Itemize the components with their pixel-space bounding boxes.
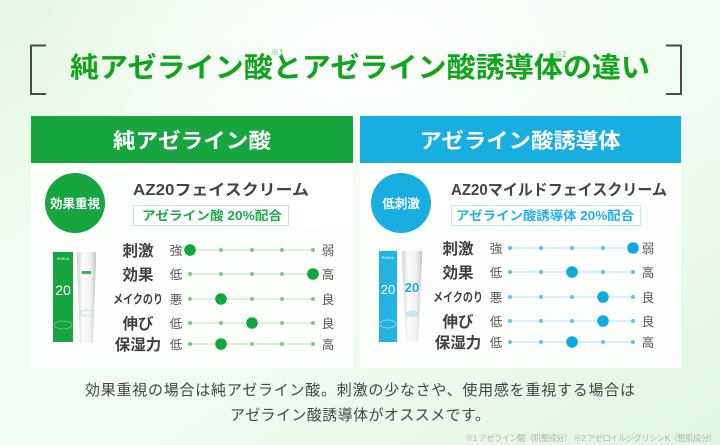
panel body (31, 163, 353, 368)
row: makeup adhesion: 悪 (170, 293, 182, 307)
panel: azelaic acid derivative (360, 116, 681, 368)
row: irritation (122, 242, 334, 260)
panel header (31, 116, 353, 163)
row: effect: 効果 (442, 264, 474, 282)
ingredient tag: アゼライン酸 20%配合 (142, 208, 283, 223)
panel body (360, 163, 681, 368)
badge: low irritation (371, 173, 431, 233)
row: moisturizing: 低 (490, 336, 503, 350)
row: effect (122, 266, 334, 284)
row: irritation: 刺激 (122, 242, 154, 260)
row: effect: 高 (322, 267, 334, 282)
icon: product box and tube: 20 (55, 282, 71, 298)
row: moisturizing (435, 334, 654, 352)
row: moisturizing: 保湿力 (115, 336, 161, 354)
icon: product box and tube: RAHUA (57, 257, 70, 261)
right bracket (666, 46, 681, 94)
icon: product box and tube (53, 252, 96, 343)
icon: product box and tube (379, 251, 422, 342)
row: makeup adhesion: メイクのり (433, 290, 483, 304)
row: irritation: 弱 (642, 242, 654, 256)
ingredient tag: アゼライン酸誘導体 20%配合 (456, 208, 635, 223)
row: irritation: 弱 (322, 244, 334, 258)
product name: AZ20フェイスクリーム (133, 181, 309, 199)
badge: low irritation: 低刺激 (382, 196, 420, 211)
footnote mark 2: ※2 (554, 50, 567, 59)
row: spreadability: 良 (642, 314, 655, 329)
row: effect (442, 264, 654, 282)
row: irritation: 強 (490, 242, 503, 256)
row: moisturizing: 保湿力 (435, 334, 481, 352)
row: effect: 低 (170, 268, 183, 282)
ingredient tag (134, 206, 288, 226)
icon: product box and tube: RAHUA (382, 256, 395, 260)
summary text (85, 382, 635, 424)
footnote mark 1: ※1 (271, 48, 284, 57)
panel header (360, 116, 681, 163)
row: makeup adhesion: 良 (642, 290, 655, 305)
panel heading: 純アゼライン酸 (113, 129, 271, 153)
row: spreadability: 良 (322, 316, 335, 331)
icon: product box and tube: 20 (405, 280, 419, 295)
panel heading: アゼライン酸誘導体 (420, 129, 620, 153)
row: makeup adhesion: 悪 (490, 291, 502, 305)
row: spreadability: 伸び (442, 313, 474, 331)
row: irritation: 強 (170, 244, 183, 258)
row: makeup adhesion: 良 (322, 292, 335, 307)
row: irritation: 刺激 (442, 240, 474, 258)
badge: effect focus: 効果重視 (50, 196, 100, 211)
footnote: ※1 アゼライン酸（肌整成分） ※2 アゼロイルジグリシンK（整肌成分） (465, 433, 717, 443)
row: makeup adhesion: メイクのり (113, 292, 163, 306)
row: spreadability (442, 313, 655, 331)
row: irritation (442, 240, 654, 258)
row: effect: 効果 (122, 266, 154, 284)
badge: effect focus (45, 173, 105, 233)
row: spreadability: 低 (170, 317, 183, 331)
row: effect: 低 (490, 266, 503, 280)
row: makeup adhesion (113, 292, 335, 307)
summary text: アゼライン酸誘導体がオススメです。 (230, 407, 490, 424)
row: moisturizing: 低 (170, 338, 183, 352)
row: moisturizing: 高 (642, 335, 654, 350)
row: makeup adhesion (433, 290, 655, 305)
row: spreadability: 伸び (122, 315, 154, 333)
row: spreadability: 低 (490, 315, 503, 329)
panel: pure azelaic acid (31, 116, 353, 368)
left bracket (31, 46, 46, 94)
heading text: 純アゼライン酸とアゼライン酸誘導体の違い (70, 52, 650, 83)
summary text: 効果重視の場合は純アゼライン酸。刺激の少なさや、使用感を重視する場合は (85, 382, 635, 399)
row: moisturizing (115, 336, 334, 354)
ingredient tag (452, 206, 640, 226)
product name: AZ20マイルドフェイスクリーム (451, 181, 667, 199)
title (31, 46, 681, 94)
row: effect: 高 (642, 265, 654, 280)
icon: product box and tube: 20 (381, 282, 395, 297)
row: moisturizing: 高 (322, 337, 334, 352)
row: spreadability (122, 315, 335, 333)
